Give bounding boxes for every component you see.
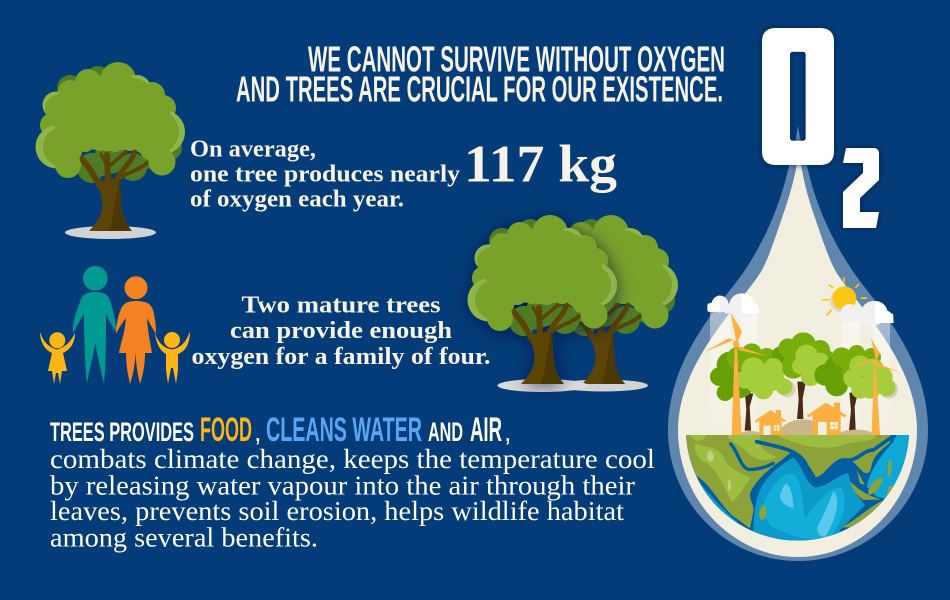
middle tree foliage <box>778 332 834 379</box>
subscript 2 <box>843 148 879 228</box>
clouds <box>707 293 894 326</box>
scene inside drop <box>680 277 913 550</box>
houses <box>754 403 847 435</box>
text block: benefits of trees <box>50 411 655 553</box>
text block: tree oxygen production: one tree produces nearly <box>190 162 460 188</box>
left tree foliage <box>710 352 755 401</box>
illustration: water drop with earth <box>668 125 928 561</box>
right child <box>155 331 190 384</box>
wind turbines <box>705 313 899 435</box>
rivers <box>728 436 890 472</box>
left child <box>40 332 75 384</box>
text block: tree oxygen production: On average, <box>190 136 316 162</box>
title <box>236 38 725 110</box>
earth <box>686 435 909 541</box>
text block: two mature trees: oxygen for a family of four. <box>192 343 491 370</box>
benefits heading: , <box>504 417 512 447</box>
benefits heading: TREES PROVIDES <box>50 417 194 447</box>
benefits heading: FOOD <box>200 411 252 449</box>
icon: two mature trees <box>468 215 678 392</box>
icon: single tree <box>36 62 185 239</box>
benefits paragraph: combats climate change, keeps the temperature cool <box>50 444 655 474</box>
drop outer ring <box>668 125 928 561</box>
land <box>680 430 891 528</box>
sun <box>822 277 867 315</box>
text block: tree oxygen production: of oxygen each year. <box>190 186 404 212</box>
trunks <box>745 382 858 431</box>
benefits heading: , <box>254 417 262 447</box>
right tree foliage <box>814 355 853 396</box>
text block: tree oxygen production <box>190 136 617 212</box>
trees <box>710 332 898 431</box>
oceans <box>753 458 865 541</box>
benefits heading: AND <box>428 417 463 447</box>
stat: 117 kg: 117 kg <box>464 136 617 194</box>
text block: two mature trees: Two mature trees <box>242 292 440 318</box>
heading: O2 symbol <box>762 28 879 228</box>
islands <box>759 458 895 527</box>
benefits heading: CLEANS WATER <box>266 411 422 449</box>
lighter land contours <box>690 435 877 502</box>
light foliage <box>779 380 898 399</box>
drop inner <box>678 150 917 557</box>
light beams <box>710 312 890 435</box>
benefits heading: AIR <box>470 411 502 449</box>
benefits paragraph <box>50 444 655 553</box>
benefits heading <box>50 411 512 449</box>
text block: two mature trees: can provide enough <box>230 317 452 344</box>
letter O <box>762 28 834 165</box>
hills <box>740 419 874 451</box>
benefits paragraph: among several benefits. <box>50 523 318 553</box>
text block: two mature trees <box>192 292 491 370</box>
father <box>73 266 117 384</box>
benefits paragraph: leaves, prevents soil erosion, helps wildlife habitat <box>50 496 625 526</box>
mother <box>116 276 156 384</box>
benefits paragraph: by releasing water vapour into the air through their <box>50 470 635 500</box>
icon: family of four <box>40 266 190 384</box>
